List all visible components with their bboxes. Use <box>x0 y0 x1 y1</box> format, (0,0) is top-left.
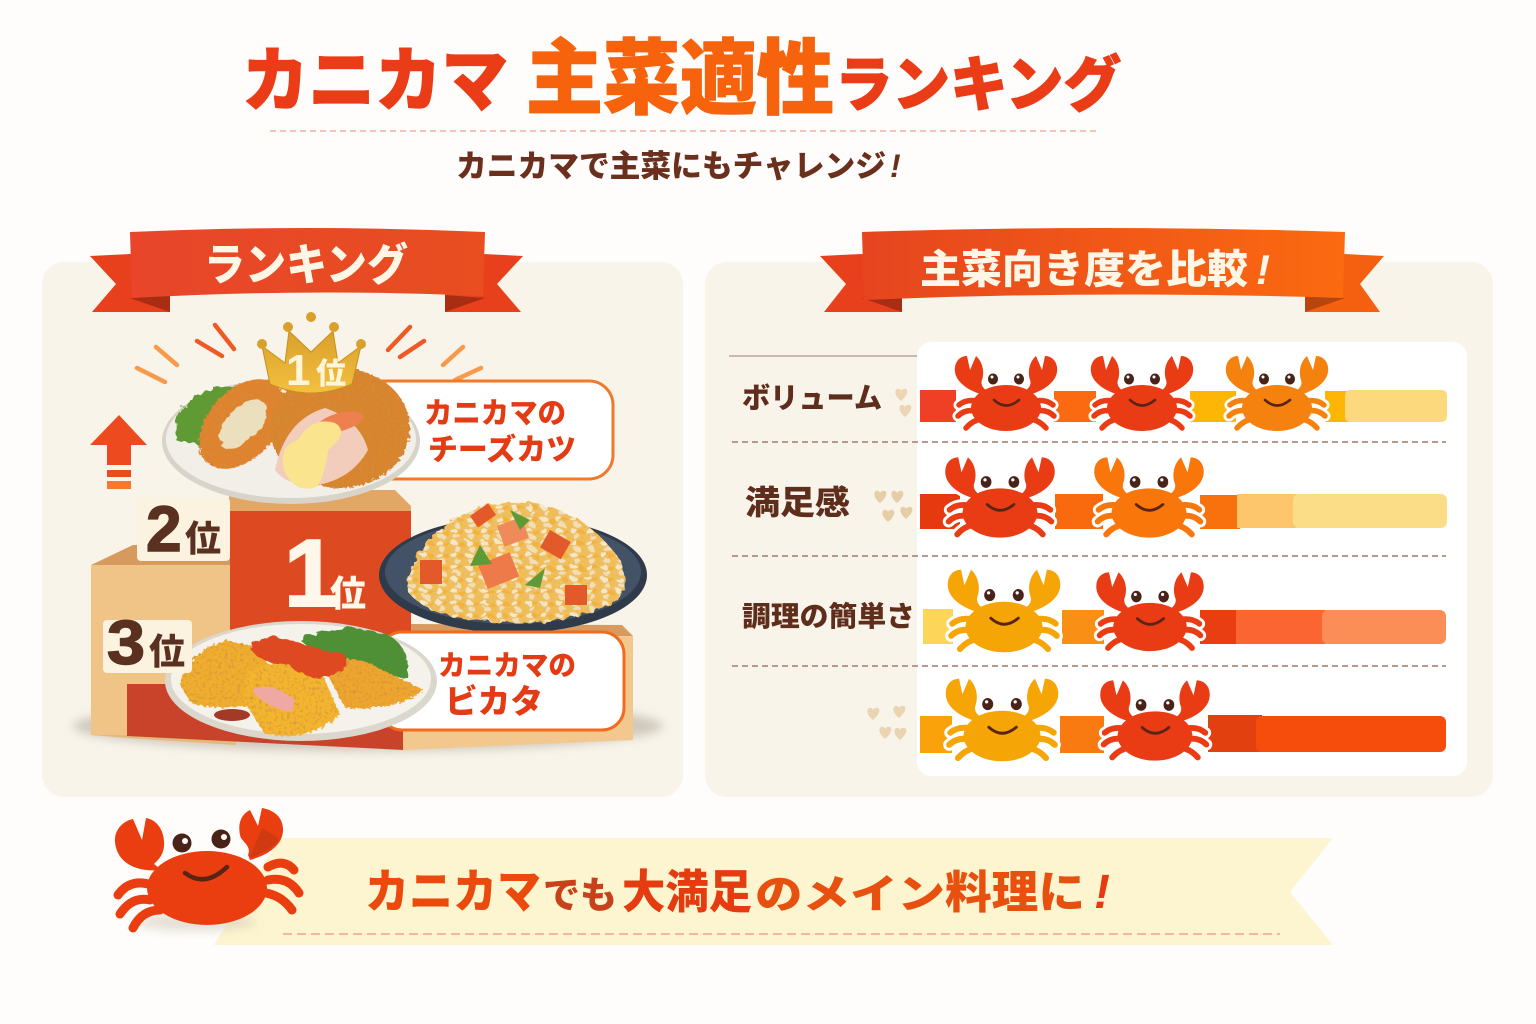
icon: gold crown <box>257 312 366 395</box>
podium blocks <box>91 490 633 750</box>
banner text: のメイン <box>755 873 945 917</box>
title: カニカマ <box>242 42 508 120</box>
title: 主菜適性 <box>526 34 834 125</box>
rank tag: 3rd place: 位 <box>149 631 185 672</box>
crumbs <box>895 389 911 417</box>
banner text: カニカマ <box>365 865 541 918</box>
celebration rays <box>137 325 481 382</box>
ribbon: ranking heading <box>90 228 523 312</box>
rank tag: 3rd place <box>103 609 192 678</box>
label: cheese katsu <box>360 381 613 479</box>
rank: 1st place on block: 位 <box>330 573 366 614</box>
row 3: ease of cooking <box>742 570 1446 652</box>
podium: red base band <box>127 684 403 750</box>
podium: first place block <box>229 490 411 639</box>
icon: up arrow <box>90 415 147 489</box>
food: cheese katsu plate <box>162 363 420 504</box>
row 2: satisfaction <box>745 457 1447 538</box>
rank tag: 3rd place: 3 <box>107 609 145 678</box>
food: fried rice plate <box>379 502 647 633</box>
row label: satisfaction: 満足感 <box>745 484 850 521</box>
panel: comparison <box>705 228 1493 797</box>
ribbon: comparison heading <box>820 228 1384 312</box>
crab scores <box>946 679 1210 761</box>
podium: right block <box>394 624 633 750</box>
subtitle: ! <box>890 148 901 184</box>
rank: 1st place on block <box>284 520 366 627</box>
label: piccata: カニカマの <box>438 650 576 681</box>
banner text: でも <box>543 875 617 916</box>
crab scores <box>948 570 1204 652</box>
food: piccata plate <box>165 621 437 741</box>
banner text: 大満足 <box>622 866 752 918</box>
panel: ranking <box>42 228 683 797</box>
score bar <box>923 609 1446 644</box>
label: cheese katsu: カニカマの <box>424 398 566 430</box>
score bar <box>920 715 1446 753</box>
ribbon: ranking heading: ランキング <box>204 240 408 290</box>
mascot: big crab <box>115 808 299 931</box>
banner text: 料理に <box>945 867 1085 918</box>
crab scores <box>945 457 1204 538</box>
rank tag: 2nd place: 2 <box>146 493 182 565</box>
banner: closing message <box>214 838 1333 945</box>
label: cheese katsu: チーズカツ <box>428 433 576 467</box>
ribbon heading text: ! <box>1256 246 1270 293</box>
row 1: volume <box>742 356 1447 431</box>
crumbs <box>867 706 906 740</box>
podium shadow <box>73 701 663 751</box>
subtitle: カニカマで主菜にもチャレンジ <box>456 149 886 184</box>
score bar <box>920 390 1447 422</box>
row 4: unlabeled <box>867 679 1446 761</box>
row label: ease of cooking: 調理の簡単さ <box>742 600 915 632</box>
score bar <box>920 494 1447 529</box>
podium: left block <box>91 545 236 745</box>
title <box>242 34 1121 125</box>
white chart area <box>917 342 1467 776</box>
icon: gold crown: 位 <box>316 358 346 391</box>
title: ランキング <box>835 52 1121 119</box>
crab scores <box>955 356 1328 431</box>
rank tag: 2nd place <box>137 493 230 565</box>
rank tag: 2nd place: 位 <box>185 518 221 559</box>
ribbon heading text: 主菜向き度を比較 <box>920 248 1248 292</box>
row label: volume: ボリューム <box>742 382 882 415</box>
label: piccata <box>380 632 624 730</box>
icon: gold crown: 1 <box>286 346 310 395</box>
label: piccata: ビカタ <box>445 683 543 720</box>
rank: 1st place on block: 1 <box>284 520 337 627</box>
banner text: ! <box>1094 866 1110 919</box>
crumbs <box>874 491 912 522</box>
banner text <box>365 865 1110 919</box>
